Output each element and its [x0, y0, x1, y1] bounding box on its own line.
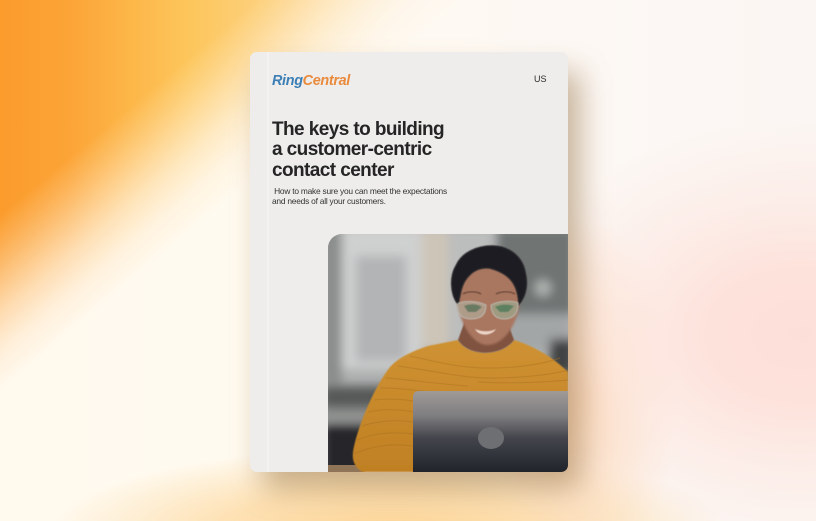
- title: The keys to building: [272, 118, 444, 140]
- region label: US: [534, 74, 547, 84]
- logo: RingCentral: RingCentral: [272, 73, 350, 89]
- subtitle: How to make sure you can meet the expectations: [274, 186, 447, 196]
- face: [457, 266, 520, 345]
- background room: [328, 234, 568, 465]
- title: contact center: [272, 160, 394, 181]
- title: a customer-centric: [272, 139, 432, 160]
- sweater: [353, 340, 568, 472]
- paper: [364, 471, 413, 472]
- smile: [475, 329, 496, 335]
- orange glow: [0, 0, 405, 376]
- hair: [452, 246, 526, 304]
- table edge: [328, 465, 364, 472]
- eyebrows: [463, 292, 515, 294]
- report cover: [250, 52, 568, 472]
- subtitle: and needs of all your customers.: [272, 196, 386, 206]
- card shadow: [262, 72, 580, 488]
- spine fold: [267, 52, 269, 472]
- subtitle: [272, 186, 447, 206]
- neck: [458, 318, 514, 353]
- laptop: [413, 391, 568, 472]
- glasses: [457, 301, 518, 319]
- photo: woman with glasses at laptop: [328, 234, 568, 472]
- title: [272, 118, 444, 181]
